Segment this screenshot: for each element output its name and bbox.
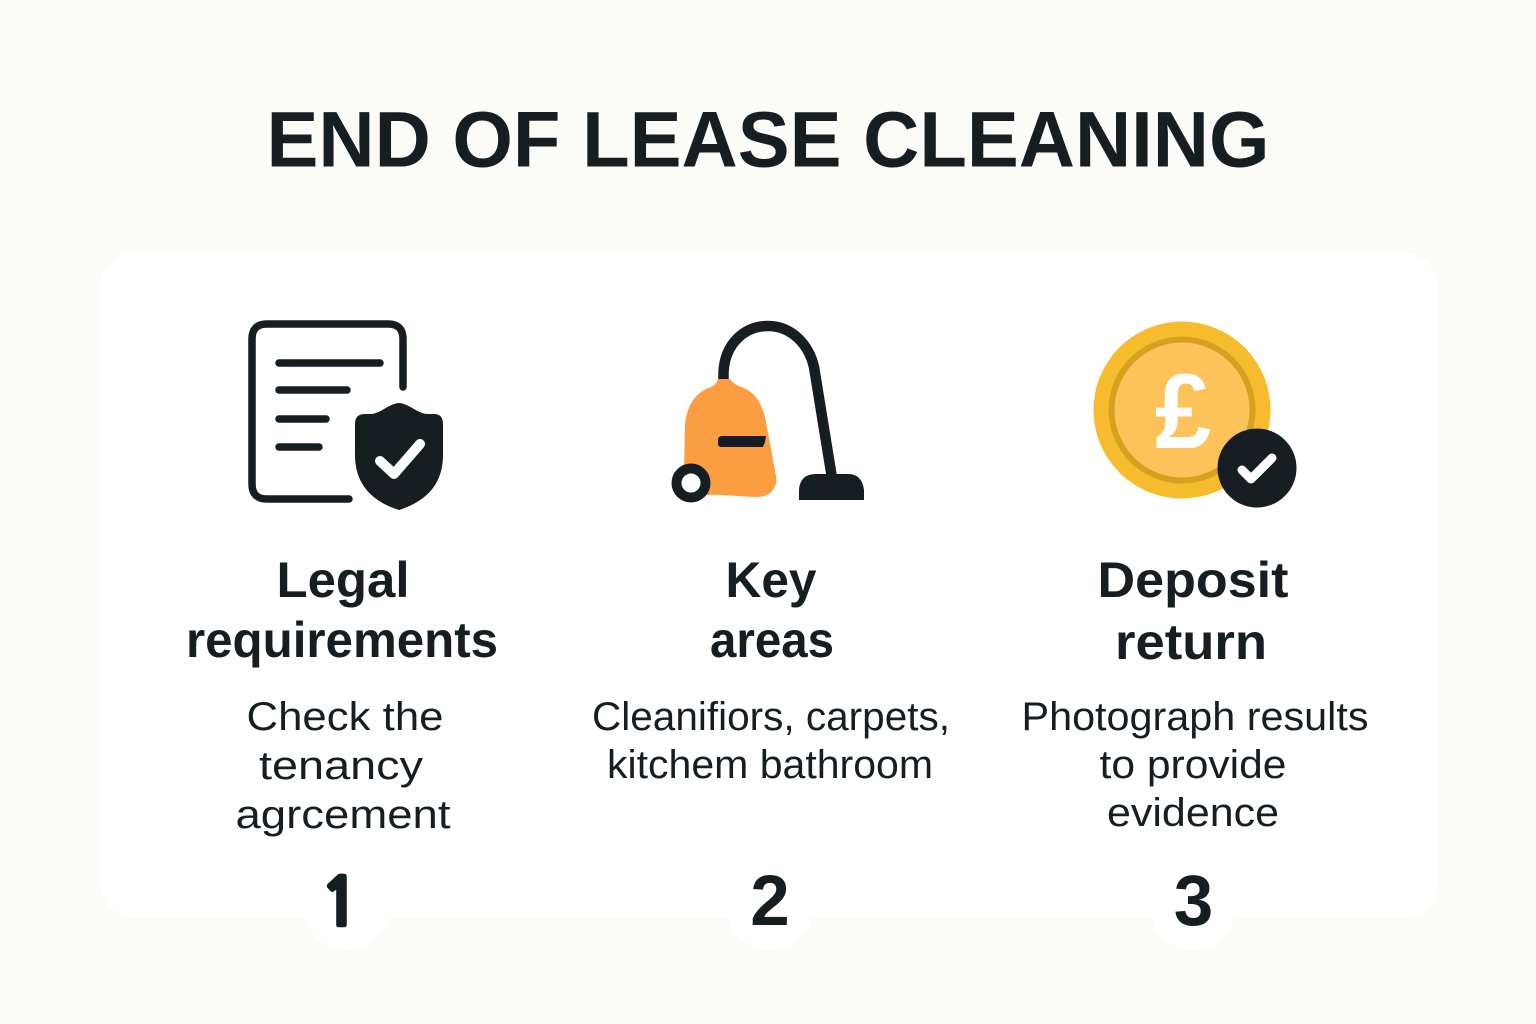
icon: vacuum cleaner <box>676 326 864 500</box>
number 2: 2 <box>750 862 790 941</box>
panel: three steps card <box>100 252 1438 950</box>
icon: pound coin with check: £ <box>1155 351 1211 471</box>
heading: deposit return: Deposit <box>1098 552 1289 608</box>
text: photograph results <box>1022 695 1368 835</box>
heading: deposit return: return <box>1115 614 1267 670</box>
heading: key areas <box>710 552 834 668</box>
text: check the tenancy agreement: tenancy <box>259 744 423 788</box>
text: check the tenancy agreement: agrcement <box>236 793 450 837</box>
icon: pound coin with check <box>1094 322 1296 508</box>
text: cleaning areas: Cleanifiors, carpets, <box>592 695 950 739</box>
heading: key areas: areas <box>710 612 834 668</box>
title: END OF LEASE CLEANING <box>266 94 1270 184</box>
text: cleaning areas: kitchem bathroom <box>607 743 933 787</box>
text: photograph results: evidence <box>1107 791 1279 835</box>
icon: document with shield <box>252 324 443 510</box>
heading: key areas: Key <box>726 552 817 608</box>
text: check the tenancy agreement <box>236 695 450 837</box>
text: cleaning areas <box>592 695 950 787</box>
number 1: 1 <box>320 870 360 936</box>
text: check the tenancy agreement: Check the <box>246 695 444 739</box>
text: photograph results: to provide <box>1100 743 1286 787</box>
heading: legal requirements <box>186 552 498 668</box>
heading: deposit return <box>1098 552 1289 670</box>
text: photograph results: Photograph results <box>1022 695 1368 739</box>
heading: legal requirements: Legal <box>276 552 410 608</box>
heading: legal requirements: requirements <box>186 612 498 668</box>
number 3: 3 <box>1174 862 1213 941</box>
